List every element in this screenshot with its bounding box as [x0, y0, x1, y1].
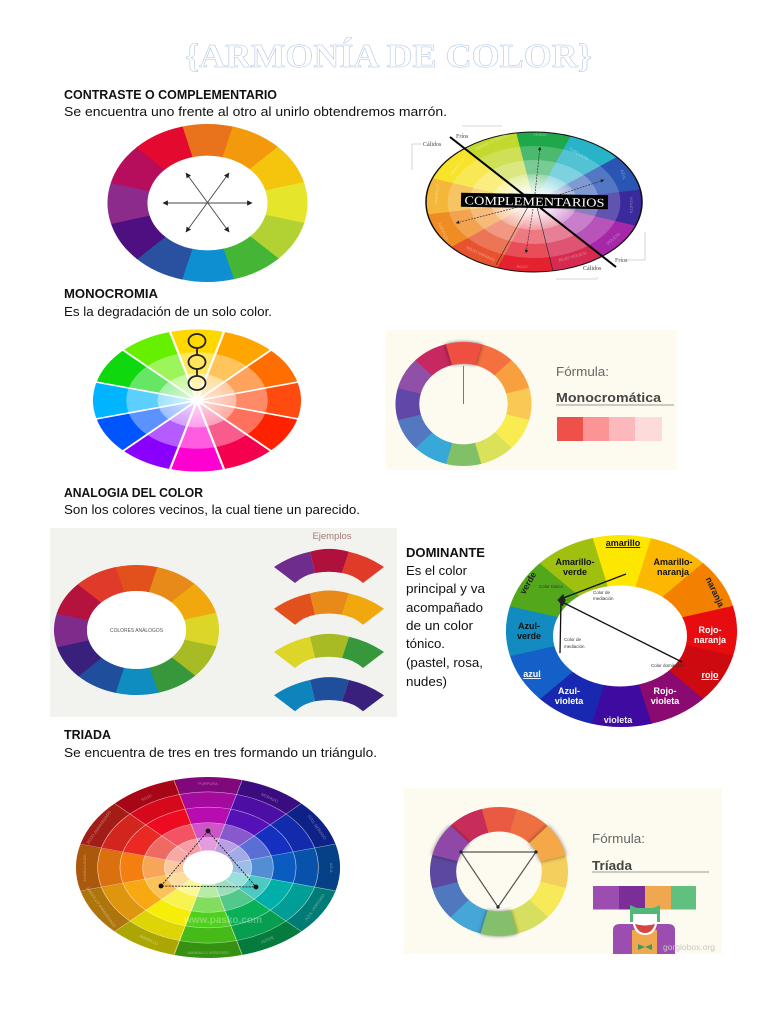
- section: contraste o complementario: [64, 88, 447, 119]
- needle: [462, 366, 464, 404]
- color wheel with complementary arrows: [94, 114, 321, 292]
- segment names: naranja: [694, 635, 727, 645]
- heading: ANALOGIA DEL COLOR: [64, 486, 203, 500]
- triangle: [459, 850, 538, 909]
- description: Se encuentra de tres en tres formando un triángulo.: [64, 746, 377, 760]
- section: analogia del color: [64, 486, 360, 517]
- segment names: amarillo: [606, 538, 641, 548]
- title: {ARMONÍA DE COLOR}: [185, 38, 592, 75]
- text block: dominante: [406, 546, 485, 689]
- formula label: Fórmula:: [556, 365, 609, 379]
- segment names: violeta: [651, 696, 680, 706]
- warm and cool labels: Cálidos: [423, 142, 442, 148]
- text block: dominante: DOMINANTE: [406, 546, 485, 560]
- warm and cool labels: Fríos: [615, 258, 628, 264]
- segment names: VERDE: [260, 934, 275, 945]
- segment names: AZUL: [329, 863, 334, 874]
- segment names: [82, 781, 334, 955]
- swatches: [593, 886, 696, 910]
- heading: CONTRASTE O COMPLEMENTARIO: [64, 88, 277, 102]
- segment names: Azul-: [558, 686, 580, 696]
- panel: formula monocromatica: [384, 330, 677, 476]
- example arc 2: [274, 591, 384, 625]
- wedge names: VERDE: [533, 132, 547, 137]
- segment names: verde: [563, 567, 587, 577]
- segment names: violeta: [604, 715, 633, 725]
- segment names: Azul-: [518, 621, 540, 631]
- panel: formula triada: [404, 788, 722, 954]
- segment names: PURPURA: [198, 781, 218, 786]
- segment names: MORADO: [260, 792, 279, 804]
- annotations: mediación: [593, 596, 614, 601]
- ring: [384, 332, 543, 476]
- segment names: ROJO ANARANJADO: [85, 810, 112, 845]
- wedge names: TURQUESA: [568, 146, 590, 162]
- segment names: AMARILLO: [138, 933, 159, 946]
- monochrome tint wheel: [95, 331, 299, 470]
- text block: dominante: de un color: [406, 619, 473, 633]
- heading: MONOCROMIA: [64, 287, 158, 301]
- heading: TRIADA: [64, 728, 111, 742]
- segment names: azul: [523, 669, 541, 679]
- wedge lines and arrows: [456, 147, 604, 271]
- warm and cool labels: Fríos: [456, 134, 469, 140]
- wedge names: VIOLETA: [605, 231, 621, 246]
- arrows: [163, 173, 252, 232]
- complementary wheel with warm and cool division: [412, 126, 645, 279]
- description: Son los colores vecinos, la cual tiene un parecido.: [64, 503, 360, 517]
- annotations: Color de: [593, 590, 611, 595]
- example arc 4: [274, 677, 384, 711]
- segment names: AMARILLO ANARANJADO: [85, 886, 117, 928]
- watermark: www.pasko.com: [183, 915, 262, 926]
- segment names: verde: [517, 631, 541, 641]
- annotations: Color de: [564, 637, 582, 642]
- segment names: violeta: [555, 696, 584, 706]
- wedge names: AMARILLO: [433, 184, 440, 204]
- dashed triangle: [159, 829, 258, 889]
- example arc 3: [274, 634, 384, 668]
- warm and cool labels: [412, 126, 645, 279]
- text block: dominante: nudes): [406, 675, 447, 689]
- formula label: Fórmula:: [592, 832, 645, 846]
- segment names: Amarillo-: [555, 557, 595, 567]
- ring: [420, 798, 578, 945]
- wedge names: ROJO VIOLETA: [558, 250, 587, 263]
- description: Es la degradación de un solo color.: [64, 305, 272, 319]
- dominant color wheel: [517, 538, 727, 725]
- warm and cool labels: Cálidos: [583, 266, 602, 272]
- wedge names: AMARILLO: [448, 158, 465, 176]
- swatches: [557, 417, 662, 441]
- segment names: AZUL VERDOSO: [304, 893, 326, 921]
- warm cool divider: [450, 137, 616, 267]
- formula name: Monocromática: [556, 390, 662, 405]
- center label: COLORES ANÁLOGOS: [110, 627, 163, 634]
- segment names: AZUL MORADO: [307, 814, 328, 841]
- segment names: rojo: [702, 670, 719, 680]
- segment names: Rojo-: [698, 625, 722, 635]
- segment names: naranja: [704, 575, 727, 610]
- watermark: gorgiobox.org: [663, 942, 715, 952]
- wedge names: AMARILLO VERDE: [474, 132, 509, 151]
- complementarios label: COMPLEMENTARIOS: [464, 193, 605, 210]
- ring: [43, 556, 230, 704]
- wedge names: ROJO NARANJA: [466, 245, 496, 263]
- text block: dominante: tónico.: [406, 637, 445, 651]
- annotations: [539, 584, 685, 668]
- ejemplos label: Ejemplos: [312, 531, 352, 542]
- segment names: ROJO: [140, 793, 152, 802]
- segment names: verde: [518, 570, 538, 596]
- wedge names: AZUL: [620, 169, 627, 181]
- segment names: ANARANJADO: [82, 854, 87, 882]
- text block: dominante: Es el color: [406, 564, 467, 578]
- text block: dominante: (pastel, rosa,: [406, 656, 483, 670]
- triad shaded wheel: [80, 780, 336, 955]
- formula name: Tríada: [592, 858, 633, 873]
- section: triada: [64, 728, 377, 760]
- section: monocromia: [64, 287, 272, 319]
- annotations: Color dominante: [651, 663, 685, 668]
- icon: joker: [613, 905, 675, 954]
- segment names: Rojo-: [654, 686, 676, 696]
- three tint markers: [188, 334, 206, 390]
- wedge names: NARANJA: [437, 222, 450, 241]
- annotations: mediación: [564, 644, 585, 649]
- segment names: naranja: [657, 567, 690, 577]
- segment names: Amarillo-: [653, 557, 693, 567]
- wedge names: [433, 132, 634, 269]
- segment names: [517, 538, 727, 725]
- description: Se encuentra uno frente al otro al unirlo obtendremos marrón.: [64, 105, 447, 119]
- wedge names: ROJO: [516, 264, 528, 269]
- text block: dominante: principal y va: [406, 582, 485, 596]
- segment names: AMARILLO VERDOSO: [187, 950, 229, 955]
- example arc 1: [274, 549, 384, 583]
- panel: colores analogos: [43, 528, 397, 717]
- wedge names: VIOLETA: [629, 197, 634, 214]
- annotations: Color tónico: [539, 584, 564, 589]
- arrows to tonic color: [558, 574, 682, 662]
- text block: dominante: acompañado: [406, 601, 483, 615]
